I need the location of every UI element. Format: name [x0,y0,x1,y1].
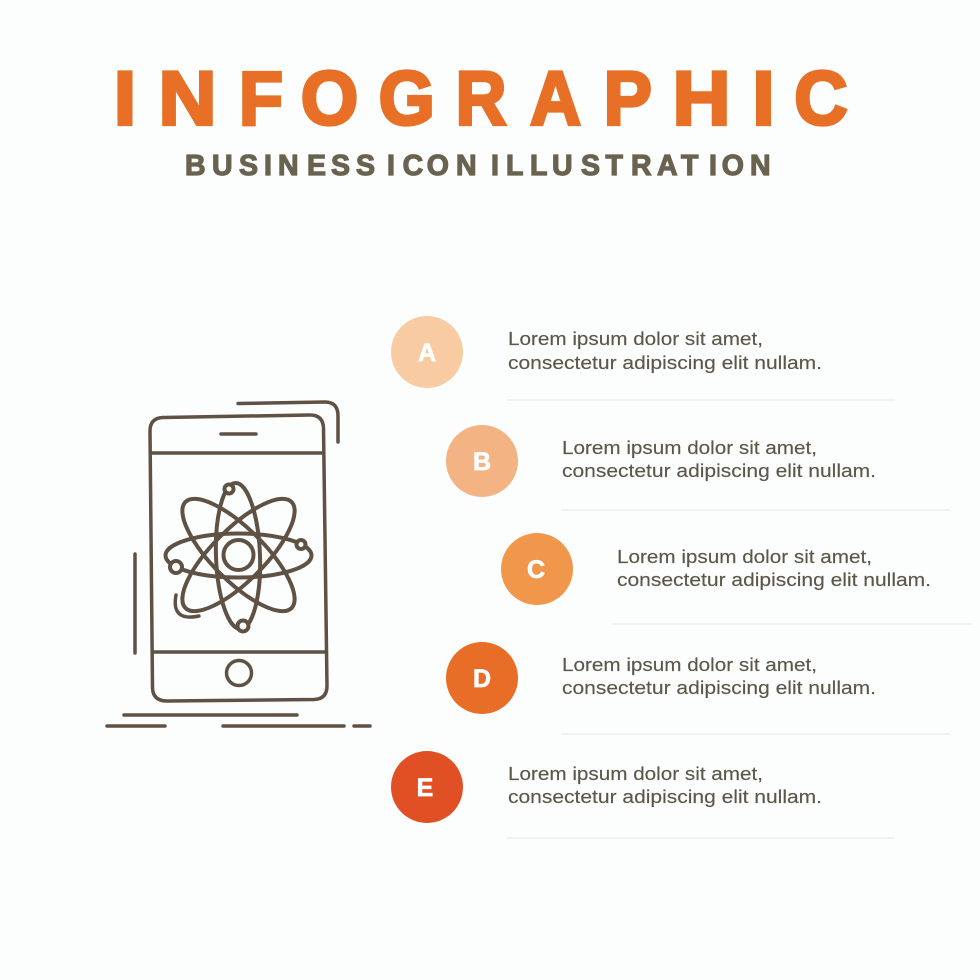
phone bottom bar [153,650,325,654]
title: P [604,56,652,141]
title [114,55,848,141]
electrons [170,484,306,632]
item B: consectetur adipiscing elit nullam. [562,460,876,481]
item B [446,425,950,510]
item D: consectetur adipiscing elit nullam. [562,677,876,698]
item D [446,642,950,734]
title: R [456,56,506,141]
text A: Lorem ipsum dolor sit amet, [508,328,763,349]
title: A [530,56,581,141]
top right corner accent [238,402,338,442]
text C: Lorem ipsum dolor sit amet, [617,546,872,567]
item B: B [473,448,491,476]
item D: D [473,665,491,693]
text E: Lorem ipsum dolor sit amet, [508,763,763,784]
title: C [794,55,848,141]
text B: Lorem ipsum dolor sit amet, [562,437,817,458]
text D: Lorem ipsum dolor sit amet, [562,654,817,675]
atom nucleus [224,540,254,570]
left vertical accent [133,554,137,653]
small arc accent [175,595,199,617]
item E [391,751,895,838]
item C [501,533,972,624]
badge C [501,533,573,605]
badge D [446,642,518,714]
home button [226,660,252,686]
item A [391,316,895,400]
badge B [446,425,518,497]
title: I [114,55,136,141]
subtitle: BUSINESS [185,150,375,182]
title: I [752,55,775,141]
badge A [391,316,463,388]
item A: consectetur adipiscing elit nullam. [508,352,822,373]
ground lines [107,715,370,726]
subtitle: ICON [387,150,477,182]
title: G [379,56,435,141]
badge E [391,751,463,823]
title: O [301,55,358,141]
title: F [239,56,283,141]
icon: mobile phone with atom [107,402,370,726]
item E: consectetur adipiscing elit nullam. [508,786,822,807]
title: H [673,55,730,141]
item A: A [418,339,436,367]
item C: consectetur adipiscing elit nullam. [617,569,931,590]
atom orbits [166,482,312,630]
item C: C [527,556,545,584]
phone top bar and speaker [151,434,323,453]
phone body [150,415,327,701]
subtitle: ILLUSTRATION [491,150,771,182]
subtitle [185,150,771,182]
item E: E [417,774,433,802]
title: N [159,55,216,141]
